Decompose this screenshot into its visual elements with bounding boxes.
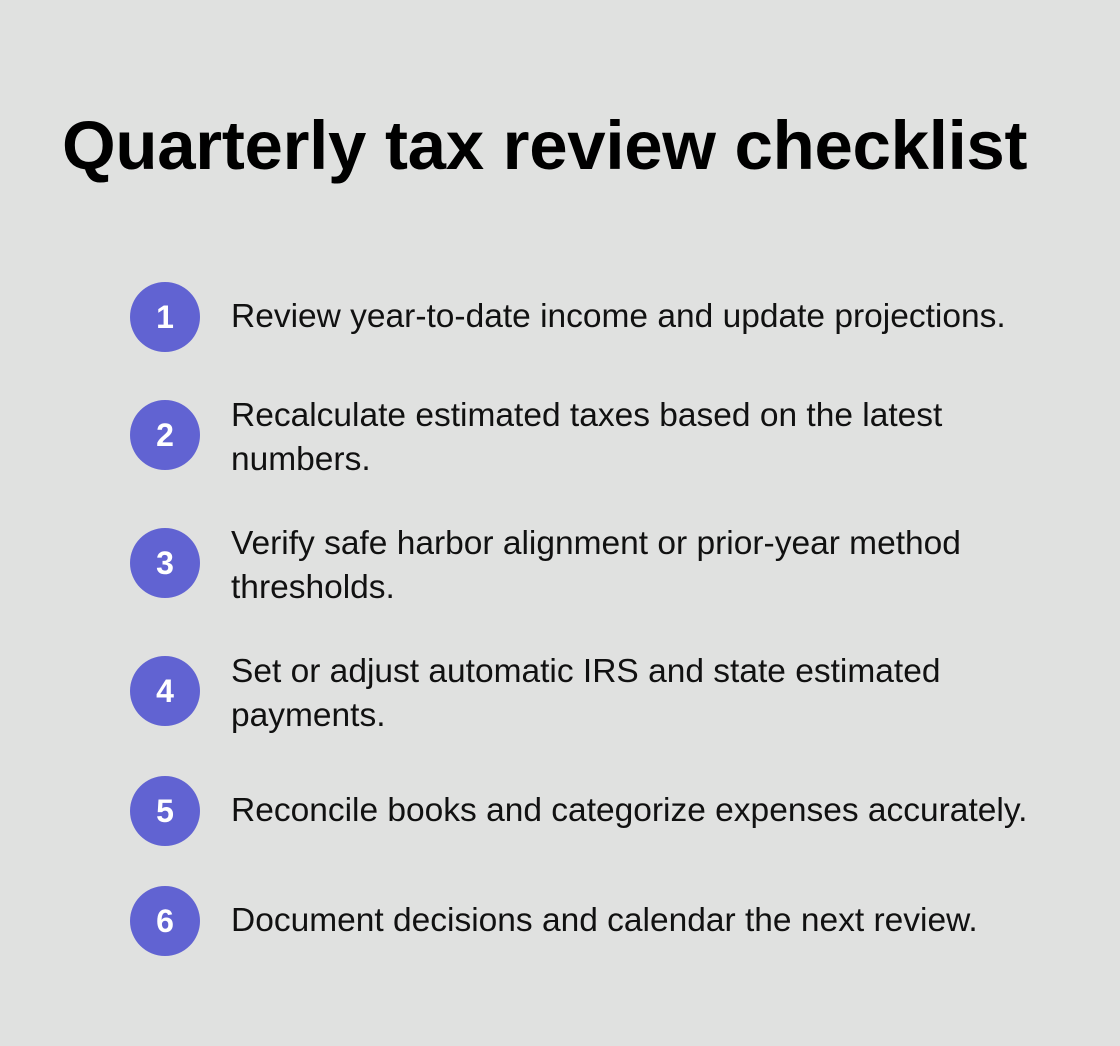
badge 4	[130, 656, 200, 726]
item 6	[130, 886, 978, 956]
text 2	[231, 397, 942, 478]
badge 5: 5	[156, 793, 174, 829]
badge 6: 6	[156, 903, 174, 939]
badge 1: 1	[156, 299, 174, 335]
badge 6	[130, 886, 200, 956]
badge 1	[130, 282, 200, 352]
text 2: numbers.	[231, 441, 371, 478]
item 5	[130, 776, 1027, 846]
badge 2: 2	[156, 417, 174, 453]
badge 3: 3	[156, 545, 174, 581]
item 3	[130, 525, 961, 606]
text 4: payments.	[231, 697, 386, 734]
badge 5	[130, 776, 200, 846]
item 2	[130, 397, 942, 478]
text 2: Recalculate estimated taxes based on the latest	[231, 397, 942, 434]
item 1	[130, 282, 1006, 352]
badge 2	[130, 400, 200, 470]
text 6: Document decisions and calendar the next review.	[231, 902, 978, 939]
text 4	[231, 653, 940, 734]
text 1: Review year-to-date income and update projections.	[231, 298, 1006, 335]
text 3: thresholds.	[231, 569, 395, 606]
text 4: Set or adjust automatic IRS and state estimated	[231, 653, 940, 690]
badge 3	[130, 528, 200, 598]
title: Quarterly tax review checklist	[62, 107, 1027, 184]
text 3: Verify safe harbor alignment or prior-year method	[231, 525, 961, 562]
item 4	[130, 653, 940, 734]
text 5: Reconcile books and categorize expenses accurately.	[231, 792, 1027, 829]
text 3	[231, 525, 961, 606]
badge 4: 4	[156, 673, 174, 709]
